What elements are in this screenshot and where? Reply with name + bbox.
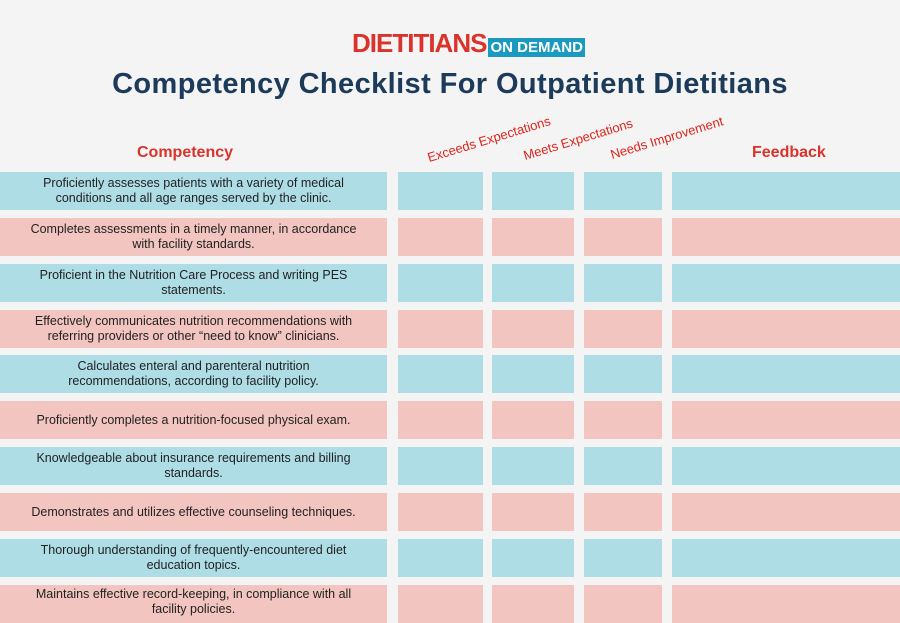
row 5	[0, 355, 900, 393]
row 1: Proficiently assesses patients with a variety of medical conditions and all age ranges served by the clinic.	[43, 176, 344, 205]
row 2: Completes assessments in a timely manner, in accordance with facility standards.	[31, 222, 356, 251]
row 4	[0, 310, 900, 348]
row 8	[0, 493, 900, 531]
row 7	[0, 447, 900, 485]
row 9	[0, 539, 900, 577]
header: competency: Competency	[137, 144, 233, 161]
row 6	[0, 401, 900, 439]
header: exceeds: Exceeds Expectations	[426, 113, 552, 165]
checklist rows	[0, 172, 900, 623]
row 10	[0, 585, 900, 623]
row 3	[0, 264, 900, 302]
row 6: Proficiently completes a nutrition-focused physical exam.	[36, 412, 351, 426]
row 1	[0, 172, 900, 210]
row 5: Calculates enteral and parenteral nutrition recommendations, according to facility policy.	[68, 359, 319, 388]
logo: DIETITIANS ON DEMAND	[352, 28, 583, 58]
header: needs: Needs Improvement	[609, 113, 725, 162]
row 2	[0, 218, 900, 256]
row 10: Maintains effective record-keeping, in compliance with all facility policies.	[36, 587, 351, 616]
title: Competency Checklist For Outpatient Dietitians	[112, 68, 788, 100]
row 8: Demonstrates and utilizes effective counseling techniques.	[31, 504, 356, 518]
header: feedback: Feedback	[752, 144, 826, 161]
row 7: Knowledgeable about insurance requirements and billing standards.	[36, 451, 351, 480]
row 3: Proficient in the Nutrition Care Process and writing PES statements.	[40, 268, 347, 297]
header: meets: Meets Expectations	[522, 115, 634, 163]
row 9: Thorough understanding of frequently-encountered diet education topics.	[41, 543, 346, 572]
row 4: Effectively communicates nutrition recommendations with referring providers or other “need to know” clinicians.	[35, 314, 352, 343]
